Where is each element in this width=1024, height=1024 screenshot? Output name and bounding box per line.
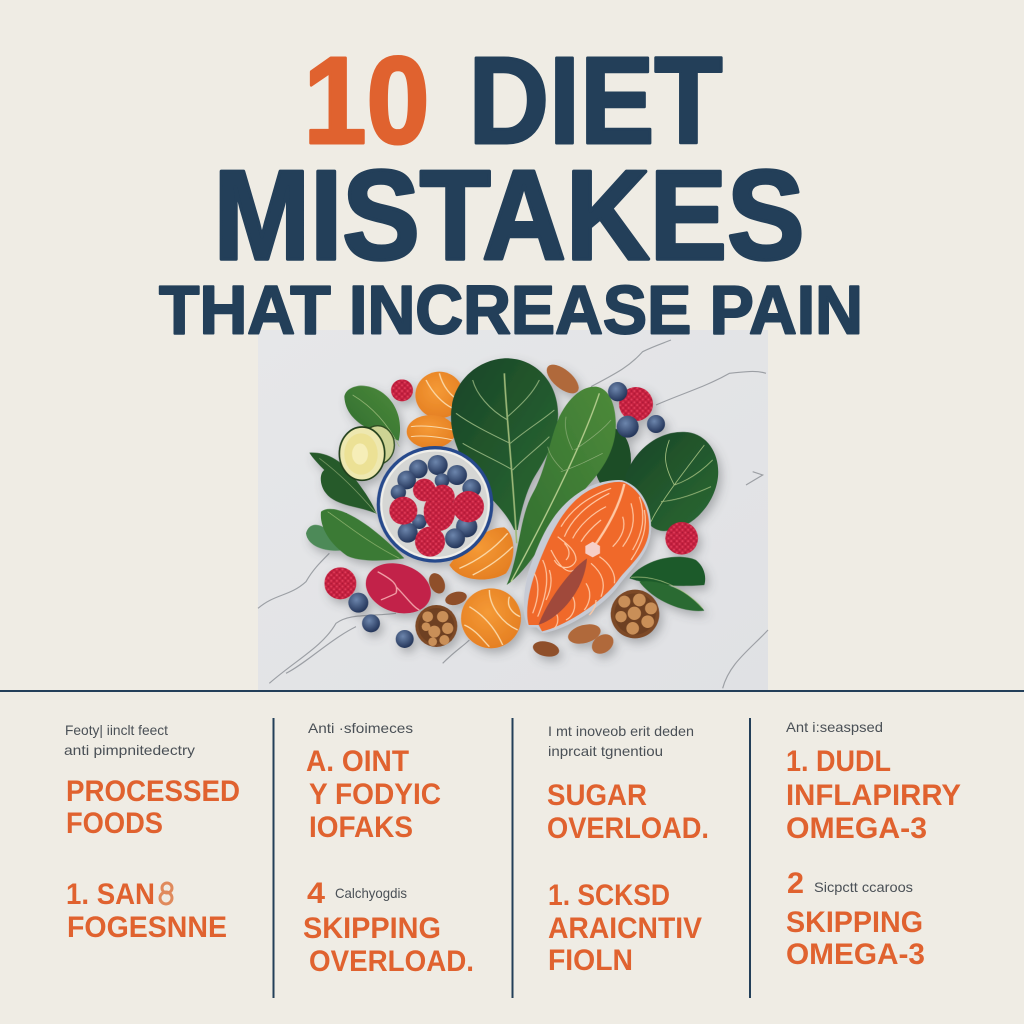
column 4 note: Sicpctt ccaroos [814, 879, 913, 895]
title [159, 33, 863, 348]
leaf: large dark center [451, 358, 558, 543]
column divider 2 [512, 718, 514, 998]
column 2 intro text: Anti ·sfoimeces [308, 720, 413, 736]
cucumber [339, 426, 394, 480]
heading: 1. san fogesnne: 1. SAN [66, 878, 155, 911]
walnut right [611, 590, 659, 638]
heading: processed foods: FOODS [66, 807, 163, 840]
marble surface [258, 330, 768, 690]
leaf: long spinach [507, 387, 616, 585]
heading: 1. dudl inflapirry omega-3: INFLAPIRRY [786, 779, 961, 812]
number 4: 4 [307, 877, 325, 910]
salmon slice: below bowl [449, 527, 513, 580]
heading: skipping overload: SKIPPING [303, 912, 441, 945]
bowl with berries [377, 446, 493, 563]
icon: small orange glyph [160, 883, 172, 904]
column 2 note: Calchyogdis [335, 885, 407, 901]
heading: skipping omega-3 [786, 906, 925, 971]
heading: sugar overload: SUGAR [547, 779, 647, 812]
column divider 3 [749, 718, 751, 998]
heading: 1. scksd araicntiv fioln: ARAICNTIV [548, 912, 702, 945]
heading: a. oint y fodyic iofaks: IOFAKS [309, 811, 413, 844]
heading: processed foods: PROCESSED [66, 775, 240, 808]
leaf: right big [625, 432, 718, 531]
leaf: lower left [306, 509, 404, 561]
leaf: left middle [309, 453, 377, 514]
raspberries loose [324, 379, 698, 599]
column 3 intro text: inprcait tgnentiou [548, 743, 663, 759]
blueberries in bowl [391, 455, 481, 548]
salmon steak [524, 480, 651, 633]
heading: skipping omega-3: SKIPPING [786, 906, 923, 939]
heading: a. oint y fodyic iofaks: A. OINT [306, 745, 409, 778]
column 3 intro text: I mt inoveob erit deden [548, 723, 694, 739]
title number: 10: 10 [304, 33, 430, 170]
heading: a. oint y fodyic iofaks [306, 745, 441, 844]
heading: 1. dudl inflapirry omega-3 [786, 745, 961, 845]
leaf: lower right [629, 557, 705, 611]
column 1 intro text [64, 722, 195, 758]
column 3 intro text [548, 723, 694, 759]
heading: skipping overload: OVERLOAD. [309, 945, 474, 978]
heading: processed foods [66, 775, 240, 840]
title word: DIET: DIET [468, 33, 722, 170]
almonds small [426, 571, 617, 659]
leaf: top left [344, 386, 400, 447]
heading: 1. scksd araicntiv fioln: FIOLN [548, 944, 633, 977]
walnut left [415, 605, 457, 647]
heading: sugar overload [547, 779, 709, 845]
heading: 1. scksd araicntiv fioln: 1. SCKSD [548, 879, 670, 912]
title line: THAT INCREASE PAIN: THAT INCREASE PAIN [159, 272, 863, 348]
heading: 1. san fogesnne [66, 878, 227, 944]
steak bone centre [585, 542, 600, 557]
panel: column 3 [547, 723, 709, 977]
panel: column 4 [786, 719, 961, 971]
column 1 intro text: Feoty| iinclt feect [65, 722, 168, 738]
food arrangement [306, 358, 718, 659]
column 1 intro text: anti pimpnitedectry [64, 742, 195, 758]
column divider 1 [272, 718, 274, 998]
heading: 1. san fogesnne: FOGESNNE [67, 911, 227, 944]
raspberries in bowl [389, 479, 484, 557]
steak notch [539, 558, 587, 625]
column 4 intro text: Ant i:seaspsed [786, 719, 883, 735]
heading: sugar overload: OVERLOAD. [547, 812, 709, 845]
title line: MISTAKES: MISTAKES [214, 144, 804, 286]
salmon slice: top [407, 372, 463, 448]
red fruit [359, 555, 437, 621]
leaf: dark behind [594, 428, 631, 492]
heading: 1. dudl inflapirry omega-3: OMEGA-3 [786, 812, 927, 845]
blueberries loose [348, 382, 665, 648]
heading: 1. scksd araicntiv fioln [548, 879, 702, 977]
heading: skipping overload [303, 912, 474, 978]
heading: a. oint y fodyic iofaks: Y FODYIC [309, 778, 441, 811]
heading: 1. dudl inflapirry omega-3: 1. DUDL [786, 745, 891, 778]
panel: column 2 [303, 720, 474, 978]
photo: healthy foods on marble [258, 330, 768, 690]
number 2: 2 [787, 867, 804, 900]
almond: top [542, 359, 583, 399]
heading: skipping omega-3: OMEGA-3 [786, 938, 925, 971]
horizontal rule [0, 690, 1024, 692]
panel: column 1 [64, 722, 240, 944]
salmon round slice [461, 588, 521, 648]
